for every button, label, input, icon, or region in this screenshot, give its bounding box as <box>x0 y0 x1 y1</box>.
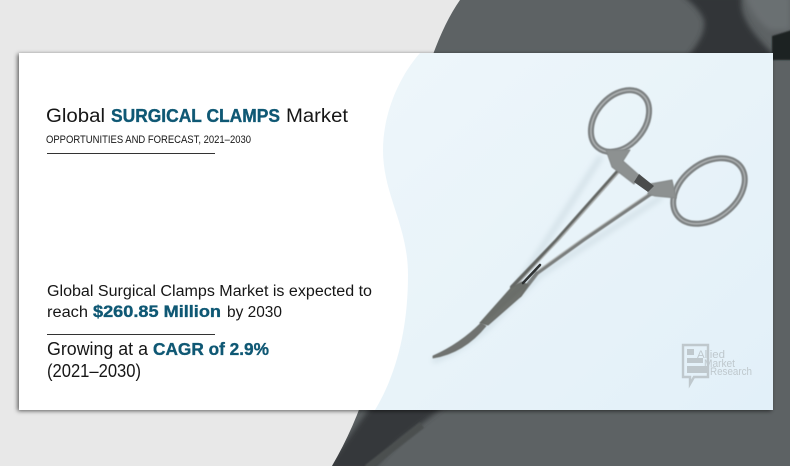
market size: year: by 2030 <box>227 304 282 321</box>
ring handle: bottom <box>661 145 757 237</box>
ring handle: top <box>579 79 661 163</box>
clamp shadow <box>435 158 660 360</box>
logo text: Market: Market <box>704 358 735 370</box>
CAGR: value: CAGR of 2.9% <box>153 339 269 359</box>
surgical clamp <box>433 79 757 360</box>
shank: lower arm <box>520 191 652 295</box>
box lock <box>634 174 654 192</box>
hinge neck: top flare <box>606 150 640 184</box>
jaw dark slot <box>523 265 540 283</box>
jaw tip <box>433 323 486 358</box>
market size: first line: Global Surgical Clamps Market is expected to <box>47 283 372 300</box>
market size text <box>47 283 372 321</box>
market size: value: $260.85 Million <box>93 303 221 321</box>
title <box>46 106 349 127</box>
panel: blue photo background <box>375 53 773 410</box>
jaw <box>480 282 528 325</box>
panel: white card <box>19 53 773 410</box>
CAGR: period: (2021–2030) <box>47 361 141 381</box>
title: Surgical Clamps: SURGICAL CLAMPS <box>111 106 280 126</box>
logo text: Research: Research <box>710 366 752 378</box>
logo text: Allied: Allied <box>697 349 725 361</box>
shank: upper arm <box>512 169 620 287</box>
title: Global: Global <box>46 106 105 127</box>
CAGR: growing at a: Growing at a <box>47 339 149 359</box>
title: Market: Market <box>286 106 349 127</box>
background: dark instrument photo <box>325 0 790 466</box>
market size: reach: reach <box>47 304 88 321</box>
subtitle: OPPORTUNITIES AND FORECAST, 2021–2030 <box>46 134 251 146</box>
logo icon: report speech bubble <box>683 345 708 384</box>
CAGR text <box>47 339 269 381</box>
logo: Allied Market Research <box>683 345 752 384</box>
hinge neck: bottom flare <box>648 180 676 198</box>
